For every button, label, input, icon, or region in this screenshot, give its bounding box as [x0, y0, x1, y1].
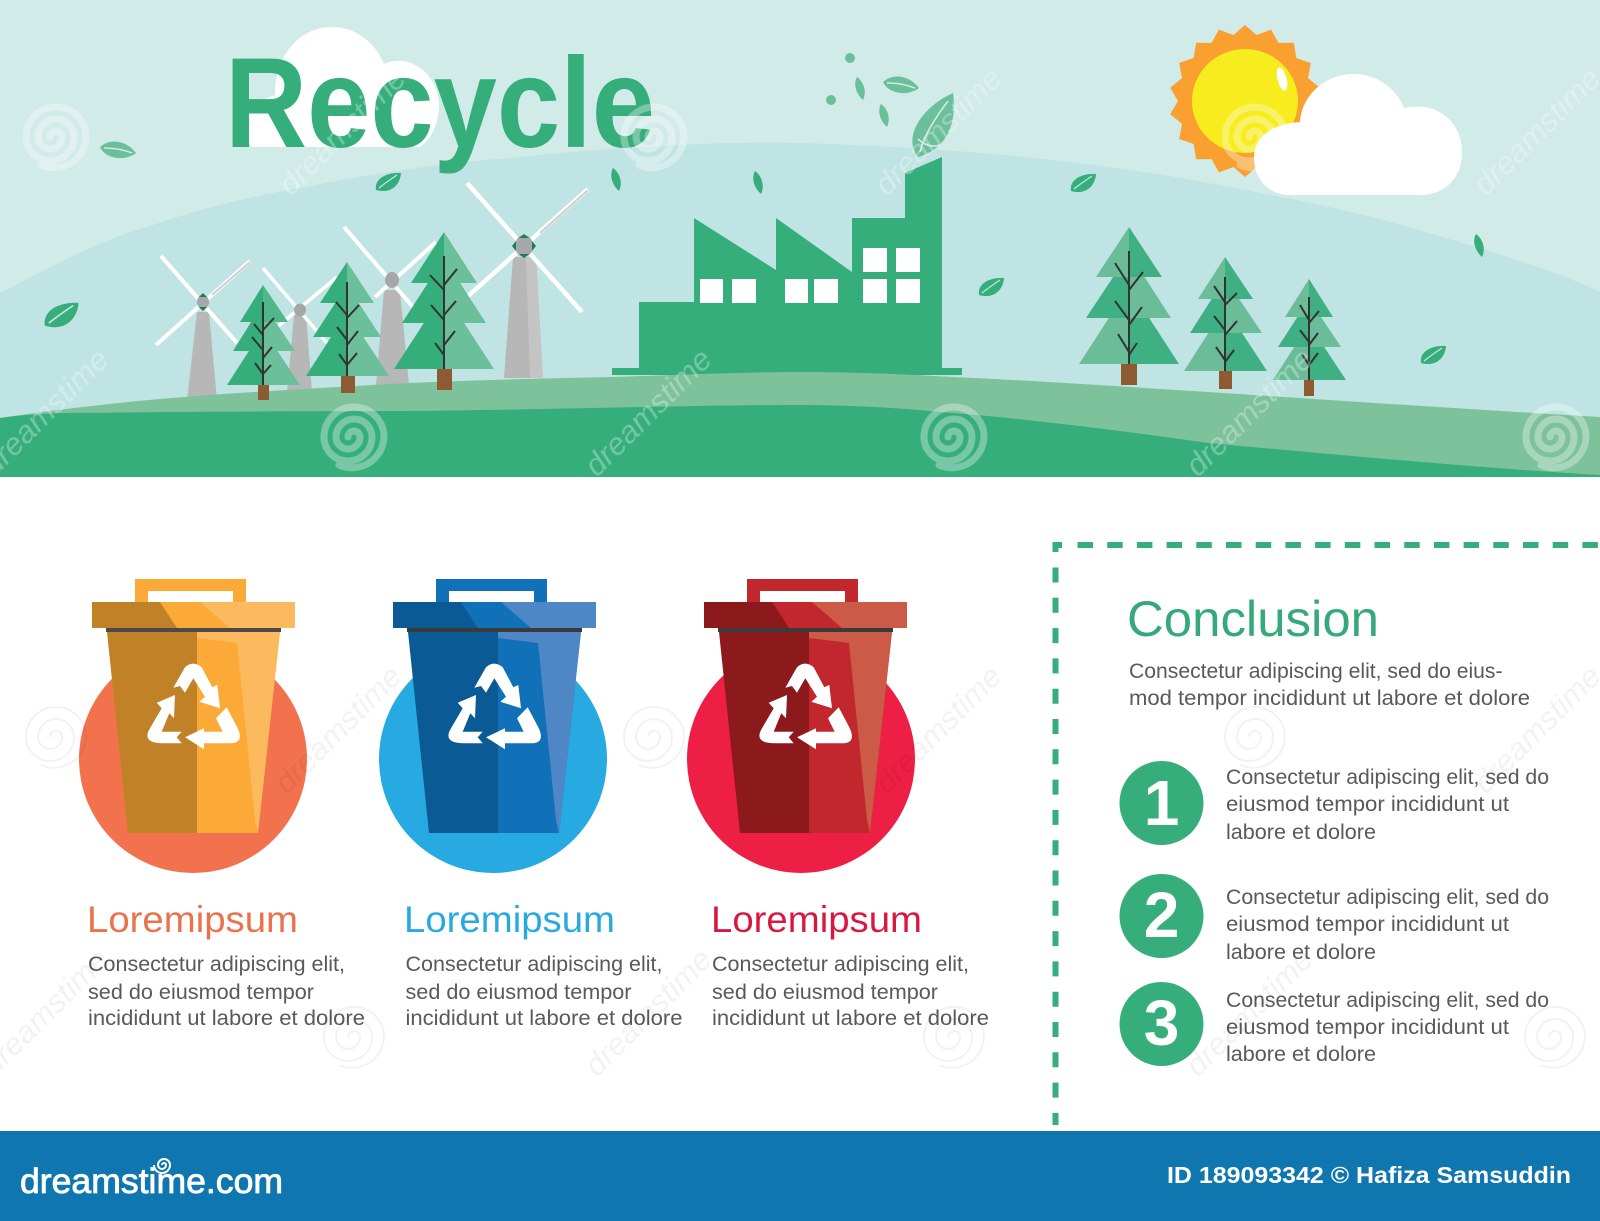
- cloud behind title: [245, 27, 439, 147]
- panel: red bin: [687, 579, 915, 873]
- item 3: Consectetur adipiscing elit, sed do: [1226, 989, 1549, 1012]
- bin lid: [393, 602, 596, 628]
- body: Consectetur adipiscing elit,: [88, 953, 345, 976]
- body: sed do eiusmod tempor: [88, 981, 314, 1004]
- factory windows: [700, 248, 920, 303]
- dashed border: [1056, 545, 1600, 1125]
- body: incididunt ut labore et dolore: [712, 1007, 989, 1030]
- panel: landscape header: [0, 0, 1600, 477]
- tree 1: [227, 285, 300, 400]
- factory: [612, 157, 962, 375]
- footer background: [0, 1131, 1600, 1221]
- conclusion intro text: Consectetur adipiscing elit, sed do eius-: [1129, 660, 1503, 683]
- item 2: 2: [1144, 879, 1179, 951]
- bin body: [407, 628, 582, 833]
- factory silhouette: [612, 157, 962, 375]
- windmill 2: [263, 268, 337, 392]
- item 2: labore et dolore: [1226, 941, 1376, 964]
- bin handle: [747, 579, 858, 602]
- body: Consectetur adipiscing elit,: [406, 953, 662, 976]
- text block: red column: [711, 899, 989, 1030]
- windmill 1: [156, 256, 250, 400]
- panel: yellow bin: [79, 579, 307, 873]
- item 2: eiusmod tempor incididunt ut: [1226, 913, 1509, 936]
- bin lid: [704, 602, 907, 628]
- faint watermark spirals on white: [26, 707, 1585, 1068]
- falling leaves: [45, 53, 1484, 364]
- heading: Loremipsum: [711, 899, 922, 940]
- watermark text on header: [0, 61, 1600, 483]
- faint watermark text on white: dreamstime: [1178, 942, 1320, 1083]
- sun disc: [1192, 49, 1298, 153]
- conclusion intro text: [1129, 660, 1530, 710]
- foreground hill dark: [0, 405, 1600, 477]
- icon: recycle symbol: [147, 664, 240, 749]
- sun rays: [1157, 14, 1333, 188]
- item 1: labore et dolore: [1226, 821, 1376, 844]
- body: incididunt ut labore et dolore: [406, 1007, 682, 1030]
- sky: [0, 0, 1600, 477]
- bin handle: [436, 579, 547, 602]
- text block: orange column: [87, 899, 365, 1030]
- item 2: [1120, 874, 1549, 964]
- faint watermark text on white: dreamstime: [577, 942, 719, 1083]
- item 3: eiusmod tempor incididunt ut: [1226, 1016, 1509, 1039]
- bin body: [718, 628, 893, 833]
- tree 3: [394, 232, 494, 390]
- tree 4: [1079, 227, 1179, 385]
- item 3: [1120, 982, 1549, 1066]
- sun highlight: [1275, 66, 1289, 92]
- windmill 4: [467, 183, 588, 378]
- watermark text on header: dreamstime: [1178, 342, 1320, 483]
- item 1: Consectetur adipiscing elit, sed do: [1226, 766, 1549, 789]
- circle: [379, 645, 607, 873]
- body: sed do eiusmod tempor: [712, 981, 938, 1004]
- body: incididunt ut labore et dolore: [88, 1007, 365, 1030]
- text block: blue column: [404, 899, 682, 1030]
- faint watermark text on white: [0, 659, 1600, 1083]
- circle: [79, 645, 307, 873]
- item 1: 1: [1144, 767, 1179, 839]
- sun: [1157, 14, 1333, 188]
- item 3: labore et dolore: [1226, 1043, 1376, 1066]
- footer logo: dreamstime.com: [20, 1162, 283, 1201]
- footer logo spiral: [154, 1159, 170, 1173]
- watermark text on header: dreamstime: [577, 342, 719, 483]
- circle: [687, 645, 915, 873]
- conclusion intro text: mod tempor incididunt ut labore et dolore: [1129, 687, 1530, 710]
- bin handle: [135, 579, 246, 602]
- body: sed do eiusmod tempor: [406, 981, 632, 1004]
- watermark text on header: dreamstime: [867, 61, 1009, 202]
- icon: recycle symbol: [759, 664, 852, 749]
- tree 2: [306, 262, 389, 393]
- panel: conclusion: [1056, 545, 1600, 1125]
- panel: blue bin: [379, 579, 607, 873]
- conclusion heading: Conclusion: [1127, 591, 1379, 647]
- body: Consectetur adipiscing elit,: [712, 953, 969, 976]
- item 3: 3: [1144, 987, 1179, 1059]
- tree 6: [1273, 279, 1346, 396]
- body: [88, 953, 365, 1030]
- item 1: [1120, 761, 1549, 845]
- faint watermark text on white: dreamstime: [267, 659, 409, 800]
- bin body: [106, 628, 281, 833]
- tree 5: [1184, 257, 1267, 389]
- windmills: [156, 183, 588, 400]
- heading: Loremipsum: [404, 899, 615, 940]
- watermark spirals on header: [26, 107, 1586, 468]
- faint watermark text on white: dreamstime: [867, 659, 1009, 800]
- bin lid: [92, 602, 295, 628]
- foreground hill light: [0, 372, 1600, 477]
- icon: recycle symbol: [448, 664, 541, 749]
- watermark text on header: dreamstime: [271, 61, 413, 202]
- heading: Loremipsum: [87, 899, 298, 940]
- cloud right: [1254, 74, 1462, 195]
- footer credit: ID 189093342 © Hafiza Samsuddin: [1167, 1162, 1571, 1188]
- item 2: Consectetur adipiscing elit, sed do: [1226, 886, 1549, 909]
- title: Recycle: [225, 32, 655, 175]
- body: [406, 953, 682, 1030]
- back hill: [0, 143, 1600, 477]
- body: [712, 953, 989, 1030]
- item 1: eiusmod tempor incididunt ut: [1226, 793, 1509, 816]
- windmill 3: [344, 227, 436, 385]
- footer bar: [0, 1131, 1600, 1221]
